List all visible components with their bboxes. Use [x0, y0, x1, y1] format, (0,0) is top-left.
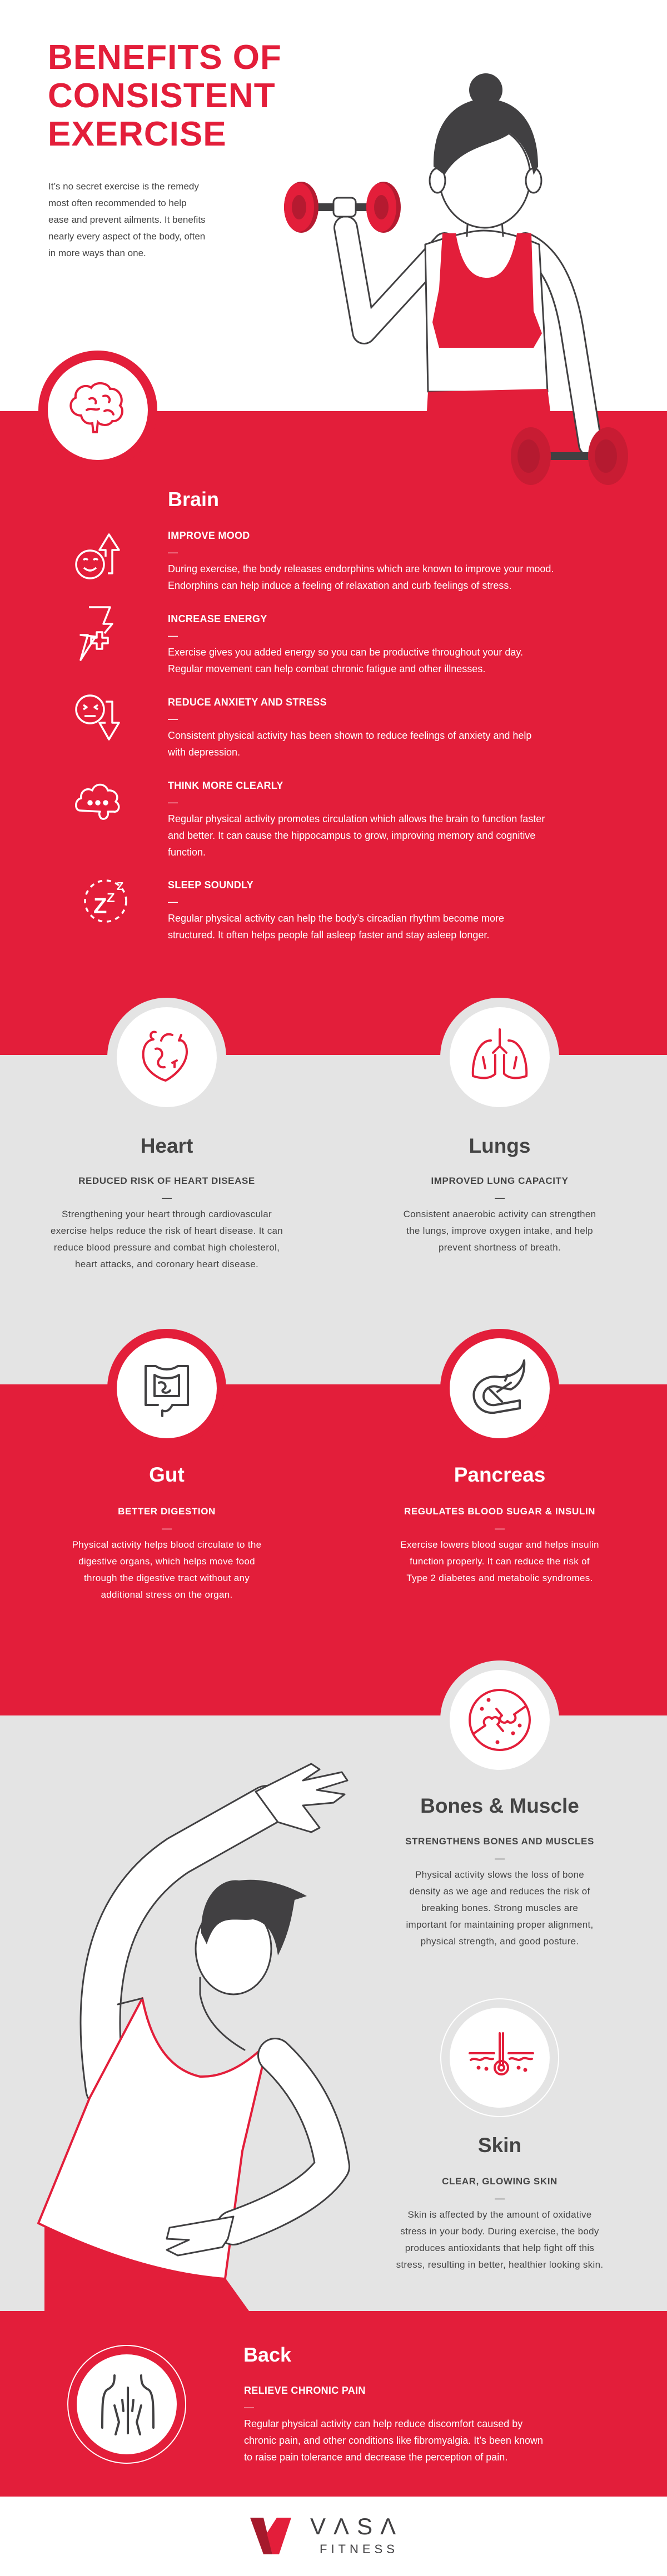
item: sleep soundly: [168, 879, 504, 941]
heart text: exercise helps reduce the risk of heart disease. It can: [51, 1226, 283, 1236]
item: reduce anxiety: REDUCE ANXIETY AND STRESS: [168, 697, 327, 708]
bones heading: Bones & Muscle: [420, 1794, 579, 1817]
bones text: Physical activity slows the loss of bone: [415, 1869, 584, 1880]
item: improve mood: [168, 530, 554, 591]
right arm down: [525, 244, 590, 444]
heart text: reduce blood pressure and combat high cholesterol,: [54, 1242, 280, 1253]
skin text: —: [495, 2193, 505, 2204]
gut text: additional stress on the organ.: [101, 1589, 233, 1600]
heart text: REDUCED RISK OF HEART DISEASE: [78, 1176, 255, 1186]
gut text: through the digestive tract without any: [84, 1573, 250, 1583]
torso with tank top: [38, 1998, 268, 2279]
back text: [244, 2385, 543, 2463]
item: sleep soundly: SLEEP SOUNDLY: [168, 879, 253, 891]
back text: Regular physical activity can help reduce discomfort caused by: [244, 2418, 522, 2429]
item: reduce anxiety: [168, 697, 531, 758]
brain heading: Brain: [168, 488, 219, 511]
neck: [467, 214, 503, 236]
pancreas text: REGULATES BLOOD SUGAR & INSULIN: [404, 1506, 595, 1517]
item: sleep soundly: Regular physical activity can help the body’s circadian rhythm become more: [168, 913, 504, 924]
item: think clearly: and better. It can cause the hippocampus to grow, improving memory and cognitive: [168, 830, 535, 841]
item: reduce anxiety: with depression.: [168, 747, 240, 758]
icon circle: back: [67, 2345, 186, 2464]
logo: VASA Fitness: VΛSΛ: [310, 2513, 404, 2539]
illustration: man stretching: [37, 1763, 350, 2311]
heart text: —: [162, 1192, 172, 1203]
bones text: physical strength, and good posture.: [421, 1936, 579, 1947]
other arm: [233, 2055, 332, 2228]
pancreas text: Type 2 diabetes and metabolic syndromes.: [406, 1573, 593, 1583]
pancreas text: —: [495, 1523, 505, 1534]
heart text: [51, 1176, 283, 1269]
lungs text: the lungs, improve oxygen intake, and help: [406, 1226, 593, 1236]
skin text: CLEAR, GLOWING SKIN: [442, 2176, 558, 2187]
lungs text: [404, 1176, 596, 1253]
item: think clearly: [168, 780, 545, 858]
icon: thought cloud: [75, 783, 120, 820]
bones text: [405, 1836, 594, 1947]
lungs text: prevent shortness of breath.: [439, 1242, 561, 1253]
skin text: produces antioxidants that help fight off this: [405, 2243, 594, 2253]
item: increase energy: INCREASE ENERGY: [168, 613, 267, 624]
icon: mood up: [75, 533, 120, 579]
back heading: Back: [243, 2343, 291, 2366]
head: [196, 1903, 271, 1994]
title: EXERCISE: [48, 115, 227, 153]
lungs heading: Lungs: [469, 1134, 530, 1157]
item: think clearly: Regular physical activity promotes circulation which allows the brain to function faster: [168, 813, 545, 824]
pancreas heading: Pancreas: [454, 1463, 545, 1486]
lungs text: IMPROVED LUNG CAPACITY: [431, 1176, 569, 1186]
gut text: BETTER DIGESTION: [118, 1506, 216, 1517]
intro text: in more ways than one.: [48, 248, 146, 258]
icon circle: pancreas: [440, 1329, 559, 1448]
item: think clearly: function.: [168, 847, 206, 858]
gut text: Physical activity helps blood circulate to the: [72, 1539, 261, 1550]
back text: RELIEVE CHRONIC PAIN: [244, 2385, 366, 2396]
icon: sleep: Z: [93, 894, 107, 918]
pancreas text: [400, 1506, 599, 1583]
item: increase energy: Exercise gives you added energy so you can be productive throughout your day.: [168, 647, 523, 658]
item: reduce anxiety: Consistent physical activity has been shown to reduce feelings of anxiety and help: [168, 730, 531, 741]
gut text: digestive organs, which helps move food: [78, 1556, 255, 1567]
shorts: [44, 2222, 250, 2353]
heart text: heart attacks, and coronary heart disease.: [75, 1259, 258, 1269]
back text: —: [244, 2402, 254, 2413]
item: increase energy: —: [168, 630, 178, 641]
skin text: stress in your body. During exercise, the body: [400, 2226, 599, 2237]
pancreas text: function properly. It can reduce the risk of: [410, 1556, 590, 1567]
dumbbell 1: [311, 203, 372, 211]
icon circle: brain: [38, 351, 157, 469]
skin text: stress, resulting in better, healthier looking skin.: [396, 2259, 603, 2270]
title: CONSISTENT: [48, 77, 276, 115]
icon: sleep: Z: [107, 891, 115, 906]
intro text: ease and prevent ailments. It benefits: [48, 214, 206, 225]
head: [439, 126, 530, 228]
bones text: STRENGTHENS BONES AND MUSCLES: [405, 1836, 594, 1847]
item: increase energy: Regular movement can help combat chronic fatigue and other illnesses.: [168, 663, 485, 674]
item: improve mood: IMPROVE MOOD: [168, 530, 250, 541]
item: improve mood: —: [168, 547, 178, 558]
icon: anxiety down: [75, 694, 120, 741]
gut text: —: [162, 1523, 172, 1534]
title: [48, 38, 282, 153]
icon circle: bones: [440, 1660, 559, 1779]
logo: VASA Fitness: [250, 2513, 404, 2556]
skin text: [396, 2176, 603, 2270]
lungs text: Consistent anaerobic activity can strengthen: [404, 1209, 596, 1219]
item: increase energy: [168, 613, 523, 674]
bones text: breaking bones. Strong muscles are: [421, 1903, 578, 1913]
bones text: important for maintaining proper alignment,: [406, 1919, 594, 1930]
gut heading: Gut: [149, 1463, 185, 1486]
title: BENEFITS OF: [48, 38, 282, 77]
icon: energy: [79, 606, 113, 661]
bones text: density as we age and reduces the risk of: [409, 1886, 590, 1897]
icon circle: gut: [107, 1329, 226, 1448]
intro text: It’s no secret exercise is the remedy: [48, 181, 199, 192]
item: think clearly: THINK MORE CLEARLY: [168, 780, 283, 791]
bones text: —: [495, 1853, 505, 1864]
back text: to raise pain tolerance and decrease the perception of pain.: [244, 2452, 507, 2463]
icon circle: skin: [440, 1998, 559, 2117]
intro text: most often recommended to help: [48, 198, 187, 208]
illustration: woman with dumbbells: [284, 73, 628, 485]
item: sleep soundly: —: [168, 896, 178, 907]
icon: sleep: [84, 879, 127, 923]
raised arm: [346, 228, 445, 332]
heart text: Strengthening your heart through cardiovascular: [62, 1209, 272, 1219]
icon circle: heart: [107, 998, 226, 1117]
intro text: nearly every aspect of the body, often: [48, 231, 205, 242]
skin text: Skin is affected by the amount of oxidative: [407, 2209, 592, 2220]
skin heading: Skin: [478, 2134, 521, 2157]
raised arm: [100, 1805, 267, 2089]
back text: chronic pain, and other conditions like fibromyalgia. It’s been known: [244, 2435, 543, 2446]
icon: sleep: Z: [117, 881, 123, 893]
item: improve mood: During exercise, the body releases endorphins which are known to improve your mood.: [168, 563, 554, 574]
torso: [425, 231, 547, 392]
intro text: [48, 181, 206, 258]
logo: VASA Fitness: FITNESS: [320, 2542, 399, 2556]
icon circle: lungs: [440, 998, 559, 1117]
item: sleep soundly: structured. It often helps people fall asleep faster and stay asleep longer.: [168, 929, 489, 941]
dumbbell 2: [534, 452, 611, 460]
item: think clearly: —: [168, 797, 178, 808]
item: reduce anxiety: —: [168, 713, 178, 724]
gut text: [72, 1506, 261, 1600]
item: improve mood: Endorphins can help induce a feeling of relaxation and curb feelings of stress.: [168, 580, 511, 591]
pancreas text: Exercise lowers blood sugar and helps insulin: [400, 1539, 599, 1550]
brain section: [75, 488, 554, 941]
heart heading: Heart: [141, 1134, 193, 1157]
hand: [256, 1764, 347, 1832]
lungs text: —: [495, 1192, 505, 1203]
